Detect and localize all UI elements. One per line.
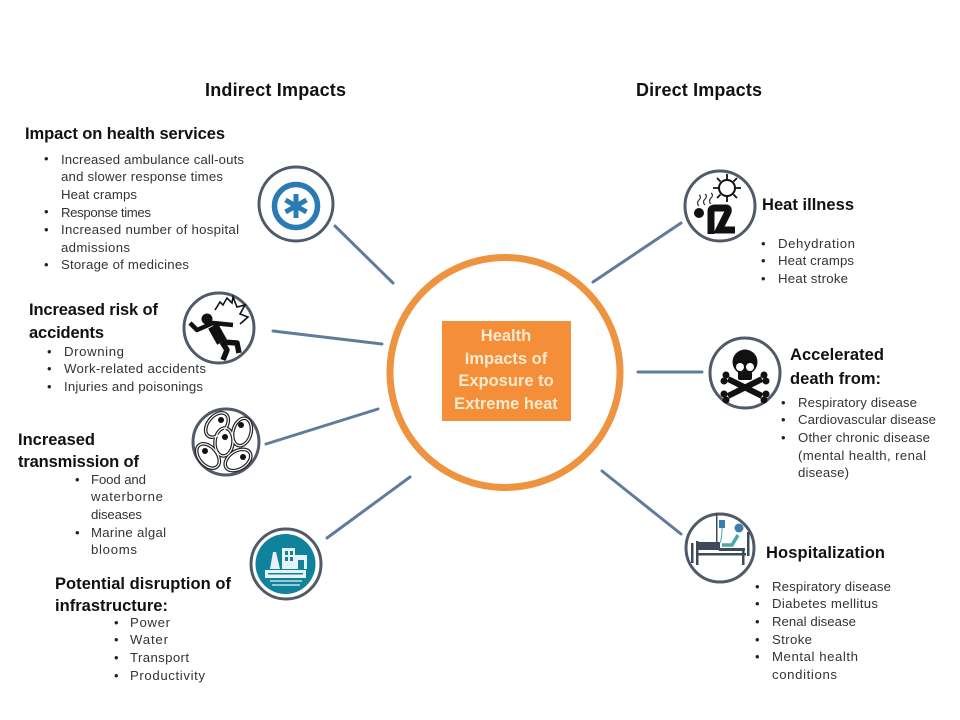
- text block: increased risk of accidents: Work-related accidents: [64, 361, 206, 376]
- text block: heat illness: •: [761, 271, 766, 286]
- connector: heat illness: [593, 223, 681, 282]
- text block: increased transmission of: diseases: [91, 507, 142, 522]
- text block: accelerated death: •: [781, 430, 786, 445]
- text block: accelerated death: disease): [798, 465, 849, 480]
- text block: increased transmission of: Increased: [18, 431, 95, 449]
- text block: heat illness: •: [761, 236, 766, 251]
- text block: heat illness: Heat cramps: [778, 253, 854, 268]
- text block: impact on health services: •: [44, 204, 49, 219]
- text block: hospitalization: conditions: [772, 667, 837, 682]
- text block: heat illness: Dehydration: [778, 236, 855, 251]
- text block: increased risk of accidents: •: [47, 344, 52, 359]
- text block: heat illness: Heat illness: [762, 196, 854, 214]
- center: health impacts circle: [390, 258, 620, 488]
- text block: hospitalization: Respiratory disease: [772, 579, 891, 594]
- text block: potential disruption of infrastructure: •: [114, 650, 119, 665]
- heading: direct impacts: Direct Impacts: [636, 80, 762, 100]
- text block: hospitalization: Hospitalization: [766, 544, 885, 562]
- text block: heat illness: •: [761, 253, 766, 268]
- text block: impact on health services: Increased number of hospital: [61, 222, 239, 237]
- text block: hospitalization: Renal disease: [772, 614, 856, 629]
- connector: hospitalization: [602, 471, 681, 534]
- text block: accelerated death: Other chronic disease: [798, 430, 930, 445]
- text block: potential disruption of infrastructure: infrastructure:: [55, 597, 168, 615]
- text block: impact on health services: Impact on health services: [25, 125, 225, 143]
- text block: accelerated death: •: [781, 412, 786, 427]
- text block: impact on health services: and slower response times: [61, 169, 223, 184]
- text block: impact on health services: Increased ambulance call-outs: [61, 152, 244, 167]
- text block: increased transmission of: Marine algal: [91, 525, 166, 540]
- icon: infrastructure: [251, 529, 321, 599]
- text block: impact on health services: Heat cramps: [61, 187, 137, 202]
- text block: impact on health services: admissions: [61, 240, 130, 255]
- text block: potential disruption of infrastructure: •: [114, 615, 119, 630]
- text block: hospitalization: •: [755, 649, 760, 664]
- icon: person falling: [184, 293, 254, 363]
- text block: increased transmission of: waterborne: [90, 489, 163, 504]
- center: health impacts circle: Impacts of: [465, 350, 548, 368]
- text block: increased transmission of: blooms: [91, 542, 137, 557]
- text block: accelerated death: Accelerated: [790, 346, 884, 364]
- heading: indirect impacts: Indirect Impacts: [205, 80, 346, 100]
- text block: increased transmission of: •: [75, 472, 80, 487]
- center: health impacts circle: Extreme heat: [454, 395, 558, 413]
- text block: increased risk of accidents: Increased risk of: [29, 301, 158, 319]
- text block: hospitalization: •: [755, 596, 760, 611]
- text block: increased transmission of: [18, 431, 166, 557]
- text block: increased risk of accidents: Injuries and poisonings: [64, 379, 203, 394]
- icon: hospital bed: [686, 513, 754, 582]
- text block: accelerated death: [781, 346, 936, 480]
- connector: infrastructure: [327, 477, 410, 538]
- text block: impact on health services: [25, 125, 244, 272]
- text block: impact on health services: Storage of medicines: [61, 257, 189, 272]
- icon: heat illness: [685, 171, 755, 241]
- text block: increased transmission of: •: [75, 525, 80, 540]
- text block: hospitalization: Stroke: [772, 632, 812, 647]
- text block: increased risk of accidents: accidents: [29, 324, 104, 342]
- text block: increased risk of accidents: •: [47, 379, 52, 394]
- text block: increased transmission of: Food and: [91, 472, 146, 487]
- text block: potential disruption of infrastructure: •: [114, 632, 119, 647]
- text block: hospitalization: Mental health: [772, 649, 858, 664]
- text block: accelerated death: Respiratory disease: [798, 395, 917, 410]
- text block: accelerated death: Cardiovascular disease: [798, 412, 936, 427]
- text block: increased risk of accidents: [29, 301, 206, 394]
- icon: medical asterisk: [259, 167, 333, 241]
- text block: hospitalization: •: [755, 632, 760, 647]
- text block: potential disruption of infrastructure: Productivity: [130, 668, 205, 683]
- text block: accelerated death: death from:: [790, 370, 881, 388]
- text block: potential disruption of infrastructure: [55, 575, 232, 683]
- connector: health services: [335, 226, 393, 283]
- text block: potential disruption of infrastructure: Water: [130, 632, 169, 647]
- connector: accelerated death: [638, 370, 702, 374]
- text block: heat illness: Heat stroke: [778, 271, 848, 286]
- icon: cells: [192, 408, 259, 475]
- text block: impact on health services: •: [44, 151, 49, 166]
- text block: accelerated death: (mental health, renal: [798, 448, 926, 463]
- text block: increased risk of accidents: •: [47, 361, 52, 376]
- text block: increased transmission of: transmission of: [18, 453, 140, 471]
- text block: impact on health services: •: [44, 257, 49, 272]
- text block: hospitalization: [755, 544, 891, 682]
- text block: impact on health services: Response times: [61, 205, 151, 220]
- text block: heat illness: [761, 196, 855, 286]
- text block: potential disruption of infrastructure: Power: [130, 615, 171, 630]
- text block: accelerated death: •: [781, 395, 786, 410]
- connector: transmission: [266, 409, 378, 444]
- center: health impacts circle: Exposure to: [458, 372, 554, 390]
- text block: impact on health services: •: [44, 222, 49, 237]
- text block: hospitalization: Diabetes mellitus: [772, 596, 878, 611]
- text block: increased risk of accidents: Drowning: [64, 344, 124, 359]
- text block: hospitalization: •: [755, 579, 760, 594]
- text block: hospitalization: •: [755, 614, 760, 629]
- connector: accidents: [273, 331, 382, 344]
- text block: potential disruption of infrastructure: Transport: [130, 650, 189, 665]
- icon: skull and crossbones: [710, 338, 780, 408]
- center: health impacts circle: Health: [481, 327, 531, 345]
- text block: potential disruption of infrastructure: •: [114, 668, 119, 683]
- text block: potential disruption of infrastructure: Potential disruption of: [55, 575, 232, 593]
